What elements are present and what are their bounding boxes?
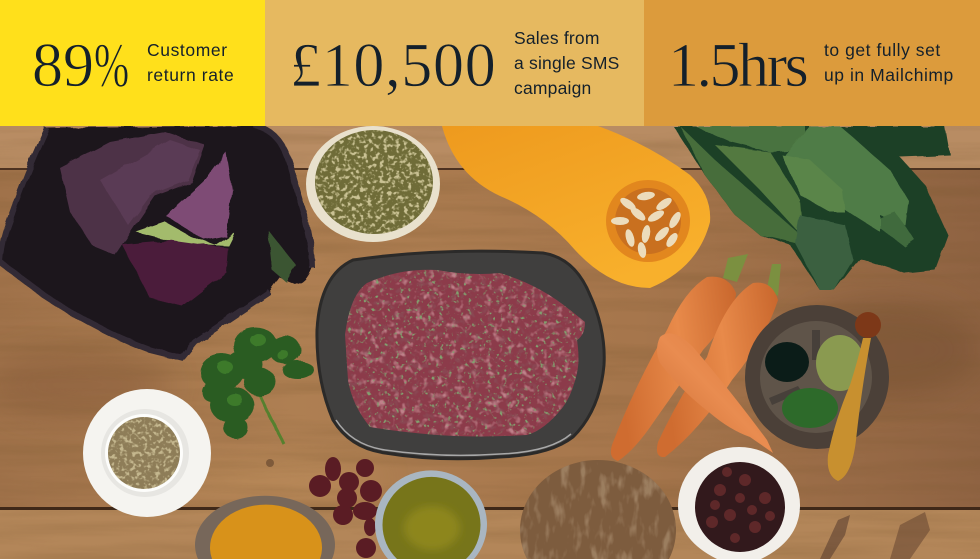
red cabbage — [0, 126, 312, 358]
peppercorn bowl — [678, 447, 800, 559]
label: to get fully set up in Mailchimp — [824, 40, 954, 85]
label: to get fully set up in Mailchimp: to get fully set — [824, 40, 941, 60]
label: sales from a single SMS campaign: a single SMS — [514, 53, 620, 73]
minced meat — [340, 265, 590, 440]
photo: ingredients on a wooden table — [0, 126, 980, 559]
label: sales from a single SMS campaign: Sales from — [514, 28, 600, 48]
carrot three — [657, 333, 773, 453]
label: customer return rate: return rate — [147, 65, 234, 85]
panel: customer return rate — [0, 0, 265, 126]
black dish — [317, 251, 604, 459]
stat: 89%: 89 — [32, 32, 94, 100]
olive oil jar — [375, 470, 487, 559]
stat: 1.5hrs: 1.5hrs — [668, 32, 806, 100]
turmeric bowl — [195, 496, 335, 559]
white plate with seeds — [83, 389, 211, 517]
stat: 89%: % — [94, 32, 129, 100]
label: sales from a single SMS campaign: campaign — [514, 78, 591, 98]
panel: SMS campaign sales — [265, 0, 644, 126]
dried berries — [309, 457, 382, 558]
label: customer return rate — [147, 40, 234, 85]
parsley — [200, 327, 314, 444]
label: customer return rate: Customer — [147, 40, 228, 60]
panel: setup time — [644, 0, 980, 126]
butternut squash — [442, 126, 710, 288]
squash seed cavity — [606, 180, 690, 262]
kale leaves — [673, 126, 950, 290]
carrot one — [611, 254, 748, 461]
wooden table — [0, 126, 980, 559]
coconut — [520, 460, 676, 559]
black powder — [765, 342, 809, 382]
stat: £10,500: £10,500 — [290, 32, 496, 100]
carrots — [611, 254, 781, 461]
wooden spoon — [828, 312, 881, 481]
label: sales from a single SMS campaign — [514, 28, 620, 98]
stat: 89% — [32, 32, 129, 100]
green powder — [816, 335, 864, 391]
small slate dish with powders — [745, 305, 889, 481]
chopped herbs — [782, 388, 838, 428]
carrot two — [657, 264, 781, 457]
chamomile bowl — [306, 126, 440, 242]
label: to get fully set up in Mailchimp: up in Mailchimp — [824, 65, 954, 85]
